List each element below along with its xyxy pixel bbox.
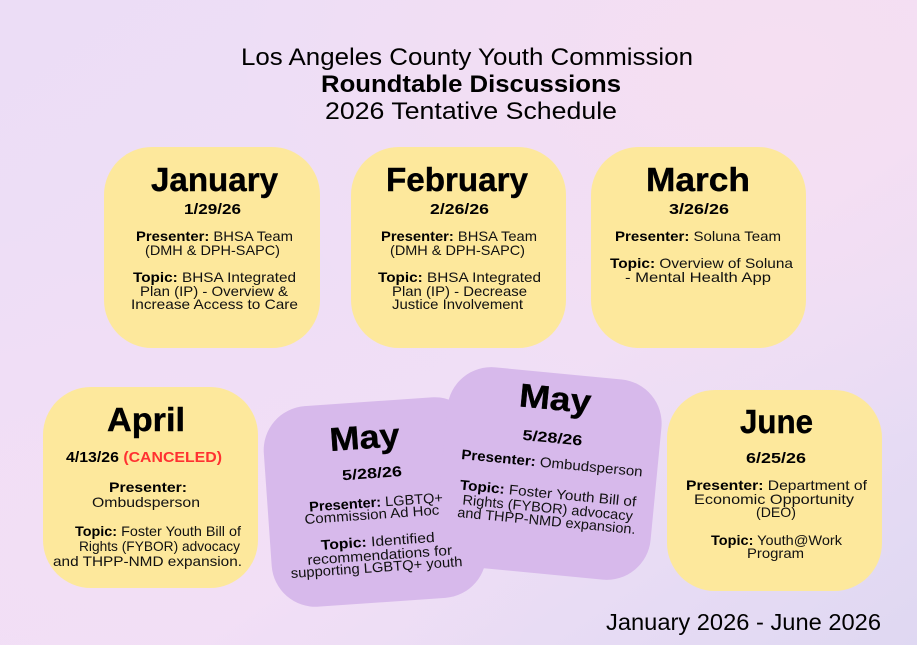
topic: January: Plan (IP) - Overview & (140, 283, 289, 299)
topic: May (457, 477, 639, 537)
topic: May: supporting LGBTQ+ youth (290, 553, 463, 581)
topic: June: Program (747, 545, 804, 561)
panel: April (43, 387, 258, 588)
panel: June (667, 390, 882, 591)
presenter: January (136, 228, 293, 258)
topic: March: - Mental Health App (625, 269, 771, 285)
panel: February (351, 147, 566, 348)
date: April, canceled: 4/13/26 (CANCELED) (66, 450, 222, 466)
title: 2026 Tentative Schedule (325, 98, 617, 125)
presenter: February: (DMH & DPH-SAPC) (390, 242, 525, 258)
presenter: April (92, 479, 200, 510)
presenter: June: Presenter: Department of (686, 477, 867, 493)
topic: May: and THPP-NMD expansion. (457, 504, 636, 537)
presenter: June: (DEO) (756, 504, 796, 520)
title: Los Angeles County Youth Commission (241, 44, 693, 71)
date: March: 3/26/26 (669, 202, 729, 218)
heading: April: April (107, 401, 185, 438)
heading: May: May (328, 416, 401, 458)
date: January: 1/29/26 (184, 202, 241, 218)
presenter: May: Commission Ad Hoc (304, 502, 440, 527)
presenter: April: Ombudsperson (92, 494, 200, 510)
topic: January: Increase Access to Care (131, 296, 298, 312)
panel: January (104, 147, 320, 348)
panel: May cards (261, 363, 666, 610)
heading: March: March (646, 161, 750, 198)
date range footer: January 2026 - June 2026 (606, 609, 881, 635)
presenter: February: Presenter: BHSA Team (381, 228, 537, 244)
topic: April (53, 523, 242, 569)
presenter: May: Presenter: Ombudsperson (461, 446, 643, 479)
topic: March: Topic: Overview of Soluna (610, 255, 793, 271)
topic: April: Topic: Foster Youth Bill of (75, 523, 241, 539)
date: February: 2/26/26 (430, 202, 489, 218)
presenter: June: Economic Opportunity (694, 491, 854, 507)
presenter: January: Presenter: BHSA Team (136, 228, 293, 244)
card shape: May, LGBTQ+ Commission Ad Hoc (261, 394, 489, 610)
date: June: 6/25/26 (746, 451, 806, 467)
topic: February: Justice Involvement (392, 296, 523, 312)
heading: June: June (740, 403, 813, 440)
presenter: May: Presenter: LGBTQ+ (309, 489, 443, 515)
topic: January: Topic: BHSA Integrated (133, 269, 296, 285)
topic: February: Plan (IP) - Decrease (392, 283, 527, 299)
panel: March (591, 147, 806, 348)
topic: April: and THPP-NMD expansion. (53, 553, 242, 569)
heading: January: January (151, 161, 279, 198)
title (241, 44, 693, 125)
topic: May: Topic: Identified (320, 529, 435, 553)
topic: May (288, 527, 463, 581)
topic: April: Rights (FYBOR) advocacy (79, 538, 240, 554)
topic: May: recommendations for (307, 542, 453, 568)
presenter: March: Presenter: Soluna Team (615, 228, 781, 244)
presenter: May (303, 489, 444, 527)
topic: June: Topic: Youth@Work (711, 532, 843, 548)
presenter: June (686, 477, 867, 520)
heading: May: May (518, 376, 594, 420)
card content: May, LGBTQ+ Commission Ad Hoc (280, 412, 463, 581)
title: Roundtable Discussions (321, 71, 621, 98)
date: May: 5/28/26 (522, 428, 583, 450)
presenter: April: Presenter: (109, 479, 187, 495)
presenter: February (381, 228, 537, 258)
heading: February: February (386, 161, 529, 198)
topic: June (711, 532, 843, 561)
topic: February (378, 269, 541, 312)
date: May: 5/28/26 (342, 464, 403, 484)
card content: May, Ombudsperson (455, 371, 651, 537)
topic: January (131, 269, 298, 312)
topic: February: Topic: BHSA Integrated (378, 269, 541, 285)
topic: March (610, 255, 793, 285)
presenter: January: (DMH & DPH-SAPC) (145, 242, 280, 258)
card shape: May, Ombudsperson (432, 363, 666, 584)
topic: May: Topic: Foster Youth Bill of (459, 477, 637, 509)
topic: May: Rights (FYBOR) advocacy (462, 491, 634, 524)
